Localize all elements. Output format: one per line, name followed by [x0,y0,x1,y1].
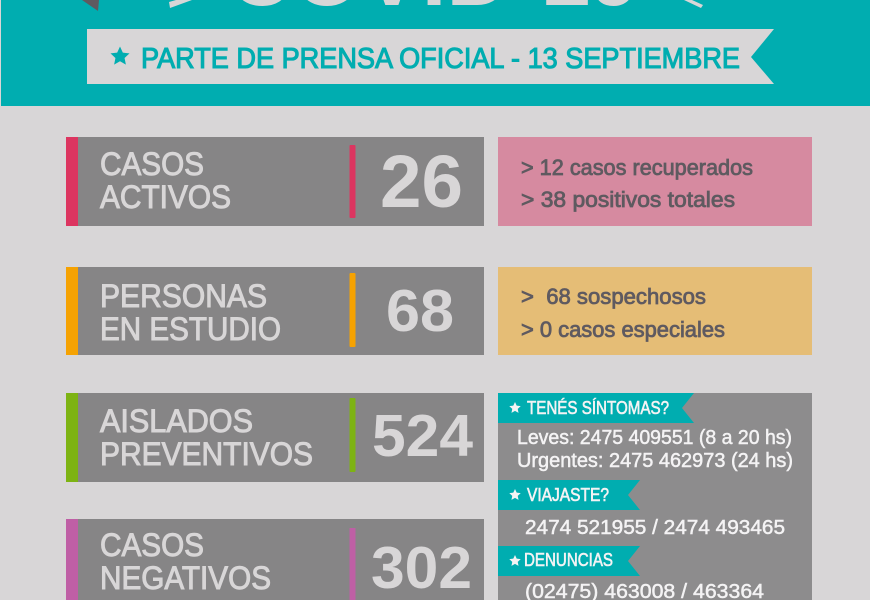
ribbon shape [498,393,694,423]
colour band [66,137,78,226]
ribbon: viajaste [498,480,640,510]
divider accent [350,398,356,472]
panel: aislados preventivos [66,393,484,482]
phone line: leves: Leves: 2475 409551 (8 a 20 hs) [517,427,792,449]
panel background [66,519,484,600]
ribbon: tenés síntomas [498,393,694,423]
label line 2: PREVENTIVOS [100,436,313,472]
teal header background [1,0,870,106]
icon: left wing [169,0,192,8]
icon: star [509,555,521,566]
panel: personas en estudio [66,267,484,355]
detail line 2: > 38 positivos totales [521,187,735,212]
ribbon heading: PARTE DE PRENSA OFICIAL - 13 SEPTIEMBRE [141,43,740,75]
detail background [498,137,812,226]
ribbon shape [87,29,774,84]
ribbon shape [498,546,640,576]
panel: casos activos [66,137,484,226]
panel: casos activos detail [498,137,812,226]
number: 68 [386,278,454,344]
label line 2: ACTIVOS [100,179,231,215]
panel: personas en estudio detail [498,267,812,355]
icon: dark ribbon tip [82,0,99,11]
ribbon: denuncias [498,546,640,576]
icon: star [110,46,130,65]
contact background [498,393,812,600]
detail line 1: > 68 sospechosos [521,284,706,309]
ribbon label: DENUNCIAS [524,550,613,570]
label: AISLADOS [100,403,253,439]
icon: star [509,402,521,413]
date ribbon [87,29,774,84]
number: 524 [372,403,473,469]
label line 2: EN ESTUDIO [100,311,281,347]
ribbon shape [498,480,640,510]
number: 26 [380,140,463,223]
panel background [66,267,484,355]
panel background [66,137,484,226]
label: PERSONAS [100,278,267,314]
label line 2: NEGATIVOS [100,560,271,596]
icon: star [509,489,521,500]
detail line 2: > 0 casos especiales [521,317,725,342]
divider accent [350,145,356,218]
colour band [66,393,78,482]
colour band [66,267,78,355]
label: CASOS [100,146,204,182]
detail line 1: > 12 casos recuperados [521,155,753,180]
ribbon label: VIAJASTE? [527,485,609,505]
number: 302 [371,535,472,600]
detail background [498,267,812,355]
label: CASOS [100,527,204,563]
icon: right wing [684,0,703,8]
panel: contact numbers [498,393,812,600]
phone line: viajaste: 2474 521955 / 2474 493465 [525,517,785,539]
phone line: urgentes: Urgentes: 2475 462973 (24 hs) [517,450,793,472]
panel background [66,393,484,482]
panel: casos negativos [66,519,484,600]
header band [1,0,870,106]
divider accent [350,528,356,600]
colour band [66,519,78,600]
divider accent [350,273,356,347]
ribbon label: TENÉS SÍNTOMAS? [527,398,669,418]
